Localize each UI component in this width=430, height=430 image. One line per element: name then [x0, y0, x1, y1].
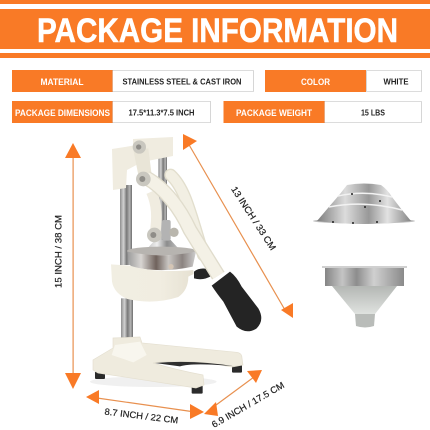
funnel spout: [355, 314, 375, 328]
dome body: [317, 184, 411, 224]
base notch shadow: [155, 362, 235, 366]
rear rod: [158, 157, 167, 253]
spec: material: MATERIAL: [40, 77, 84, 87]
cast base: [93, 337, 243, 388]
front rod upper: [120, 185, 132, 265]
label: lever length: 13 INCH / 33 CM: [229, 185, 278, 252]
bolt link: [133, 148, 152, 175]
label: base width: 8.7 INCH / 22 CM: [104, 407, 179, 425]
arrow: lever length: [183, 134, 293, 318]
pivot bolts: [133, 140, 179, 242]
top bracket: [112, 137, 173, 190]
arrow: base depth: [204, 370, 262, 416]
front rod lower: [121, 298, 133, 340]
spec: color: [265, 70, 422, 92]
spec: material: [12, 70, 254, 92]
floor shadow: [90, 376, 217, 387]
cup screw: [168, 264, 174, 269]
black handle: [212, 272, 261, 331]
label: height: 15 INCH / 38 CM: [54, 215, 64, 288]
header banner: [0, 0, 430, 58]
base highlight: [112, 342, 147, 362]
arrow: height: [65, 143, 81, 389]
spec: color: COLOR: [301, 77, 331, 87]
accessory: strainer dome: [313, 184, 415, 224]
spec: package weight: PACKAGE WEIGHT: [236, 108, 313, 118]
spec: material: STAINLESS STEEL & CAST IRON: [122, 76, 242, 86]
funnel rim: [322, 266, 407, 268]
steel cup: [127, 252, 196, 270]
label: base depth: 6.9 INCH / 17.5 CM: [210, 380, 286, 430]
knob: [194, 269, 212, 279]
rear arm: [171, 175, 203, 255]
spec: package dimensions: PACKAGE DIMENSIONS: [15, 108, 110, 118]
white juice cup: [111, 264, 194, 302]
strainer cone: [143, 240, 183, 253]
accessory: funnel: [322, 266, 407, 328]
juicer press: [90, 137, 261, 394]
arrow: base width: [86, 390, 204, 419]
dome rim: [313, 218, 415, 224]
spec: package dimensions: 17.5*11.3*7.5 INCH: [128, 108, 195, 118]
funnel band: [325, 268, 404, 286]
spec: package dimensions: [12, 101, 210, 123]
dome holes: [332, 193, 381, 224]
dome ridges: [329, 193, 402, 210]
spec: color: WHITE: [384, 76, 409, 86]
funnel cone: [332, 286, 397, 314]
spec: package weight: [224, 101, 422, 123]
spec: package weight: 15 LBS: [361, 108, 385, 118]
middle link: [151, 192, 156, 233]
feet: [95, 365, 242, 394]
main lever: [146, 178, 218, 276]
cup rim: [127, 247, 196, 255]
juicer stem: [162, 220, 171, 241]
